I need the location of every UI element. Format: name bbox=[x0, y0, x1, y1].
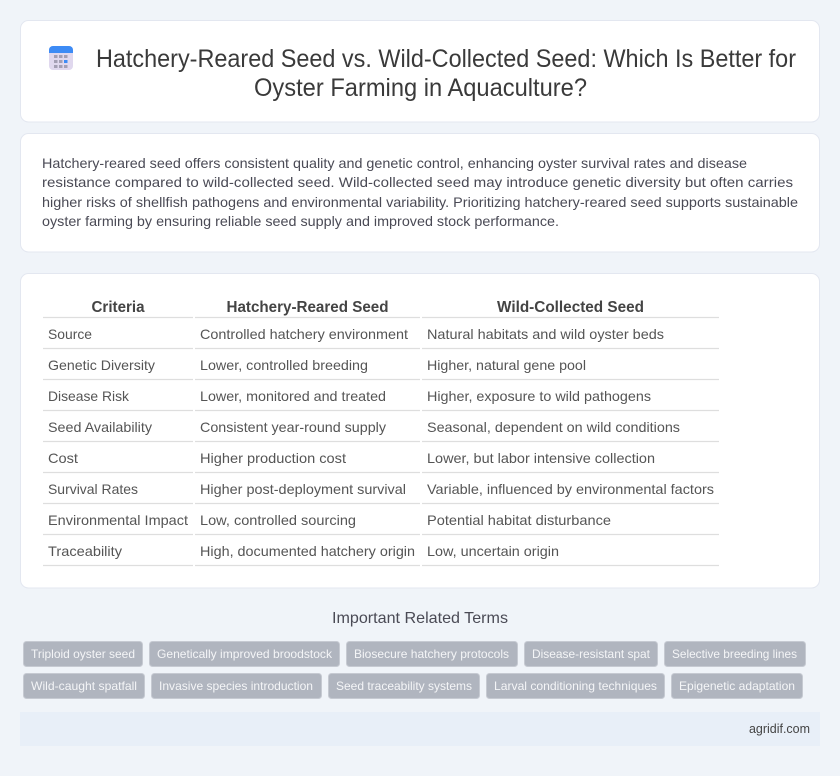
row: Disease Risk: Higher, exposure to wild pathogens bbox=[427, 388, 651, 404]
table header: Wild-Collected Seed bbox=[497, 299, 644, 316]
tag bbox=[328, 674, 480, 698]
tag: Triploid oyster seed bbox=[31, 647, 135, 661]
panel: title header bbox=[20, 20, 820, 122]
tag bbox=[24, 674, 144, 698]
tags: related terms bbox=[24, 642, 806, 698]
tag: Invasive species introduction bbox=[159, 679, 313, 693]
row: Disease Risk: Disease Risk bbox=[48, 388, 130, 404]
table header: Hatchery-Reared Seed bbox=[226, 299, 388, 316]
row: Seed Availability: Seed Availability bbox=[48, 419, 152, 435]
tag: Disease-resistant spat bbox=[532, 647, 651, 661]
row: Traceability: High, documented hatchery origin bbox=[200, 543, 415, 559]
table header bbox=[92, 299, 644, 316]
row: Source: Natural habitats and wild oyster beds bbox=[427, 326, 664, 342]
row: Genetic Diversity bbox=[48, 357, 586, 373]
row: Traceability: Traceability bbox=[48, 543, 122, 559]
tag: Epigenetic adaptation bbox=[679, 679, 795, 693]
row: Traceability bbox=[48, 543, 559, 559]
row: Source: Source bbox=[48, 326, 92, 342]
title: Oyster Farming in Aquaculture? bbox=[254, 74, 587, 102]
tag bbox=[486, 674, 664, 698]
table header: Criteria bbox=[92, 299, 145, 316]
row: Environmental Impact: Low, controlled sourcing bbox=[200, 512, 356, 528]
tag: Selective breeding lines bbox=[672, 647, 797, 661]
intro text: Hatchery-reared seed offers consistent quality and genetic control, enhancing oyster survival rates and disease bbox=[42, 155, 747, 171]
row: Environmental Impact: Potential habitat disturbance bbox=[427, 512, 611, 528]
tag: Wild-caught spatfall bbox=[31, 679, 137, 693]
tag bbox=[152, 674, 322, 698]
tag bbox=[346, 642, 518, 666]
row: Disease Risk: Lower, monitored and treated bbox=[200, 388, 386, 404]
footer: agridif.com bbox=[749, 722, 810, 736]
panel: introduction bbox=[20, 134, 820, 252]
row: Cost: Higher production cost bbox=[200, 450, 346, 466]
tag bbox=[672, 674, 802, 698]
tag bbox=[24, 642, 142, 666]
tag: Biosecure hatchery protocols bbox=[354, 647, 509, 661]
row: Cost: Lower, but labor intensive collection bbox=[427, 450, 655, 466]
row: Disease Risk bbox=[48, 388, 651, 404]
row: Cost bbox=[48, 450, 655, 466]
intro text: resistance compared to wild-collected seed. Wild-collected seed may introduce genetic diversity but often carries bbox=[42, 174, 793, 190]
row: Cost: Cost bbox=[48, 450, 78, 466]
row: Environmental Impact: Environmental Impact bbox=[48, 512, 188, 528]
row: Genetic Diversity: Higher, natural gene pool bbox=[427, 357, 586, 373]
icon: calendar bbox=[49, 46, 73, 70]
row: Environmental Impact bbox=[48, 512, 611, 528]
intro text bbox=[42, 155, 798, 229]
intro text: higher risks of shellfish pathogens and environmental variability. Prioritizing hatchery-reared seed supports sustainable bbox=[42, 194, 798, 210]
panel: comparison table bbox=[20, 274, 820, 588]
row: Genetic Diversity: Lower, controlled breeding bbox=[200, 357, 368, 373]
row: Source bbox=[48, 326, 664, 342]
row: Traceability: Low, uncertain origin bbox=[427, 543, 559, 559]
tag bbox=[664, 642, 806, 666]
tag: Larval conditioning techniques bbox=[494, 679, 657, 693]
row: Seed Availability: Seasonal, dependent on wild conditions bbox=[427, 419, 680, 435]
tag: Genetically improved broodstock bbox=[157, 647, 333, 661]
row: Source: Controlled hatchery environment bbox=[200, 326, 408, 342]
tag bbox=[150, 642, 340, 666]
row: Survival Rates: Higher post-deployment survival bbox=[200, 481, 406, 497]
title: Hatchery-Reared Seed vs. Wild-Collected Seed: Which Is Better for bbox=[96, 45, 796, 73]
title bbox=[96, 45, 796, 102]
footer bbox=[20, 712, 820, 746]
tag: Seed traceability systems bbox=[336, 679, 472, 693]
row: Genetic Diversity: Genetic Diversity bbox=[48, 357, 155, 373]
tag bbox=[524, 642, 658, 666]
row: Seed Availability: Consistent year-round supply bbox=[200, 419, 386, 435]
heading: related terms: Important Related Terms bbox=[332, 610, 508, 627]
row: Survival Rates bbox=[48, 481, 714, 497]
row: Survival Rates: Survival Rates bbox=[48, 481, 138, 497]
row: Survival Rates: Variable, influenced by environmental factors bbox=[427, 481, 714, 497]
intro text: oyster farming by ensuring reliable seed supply and improved stock performance. bbox=[42, 213, 559, 229]
row: Seed Availability bbox=[48, 419, 680, 435]
